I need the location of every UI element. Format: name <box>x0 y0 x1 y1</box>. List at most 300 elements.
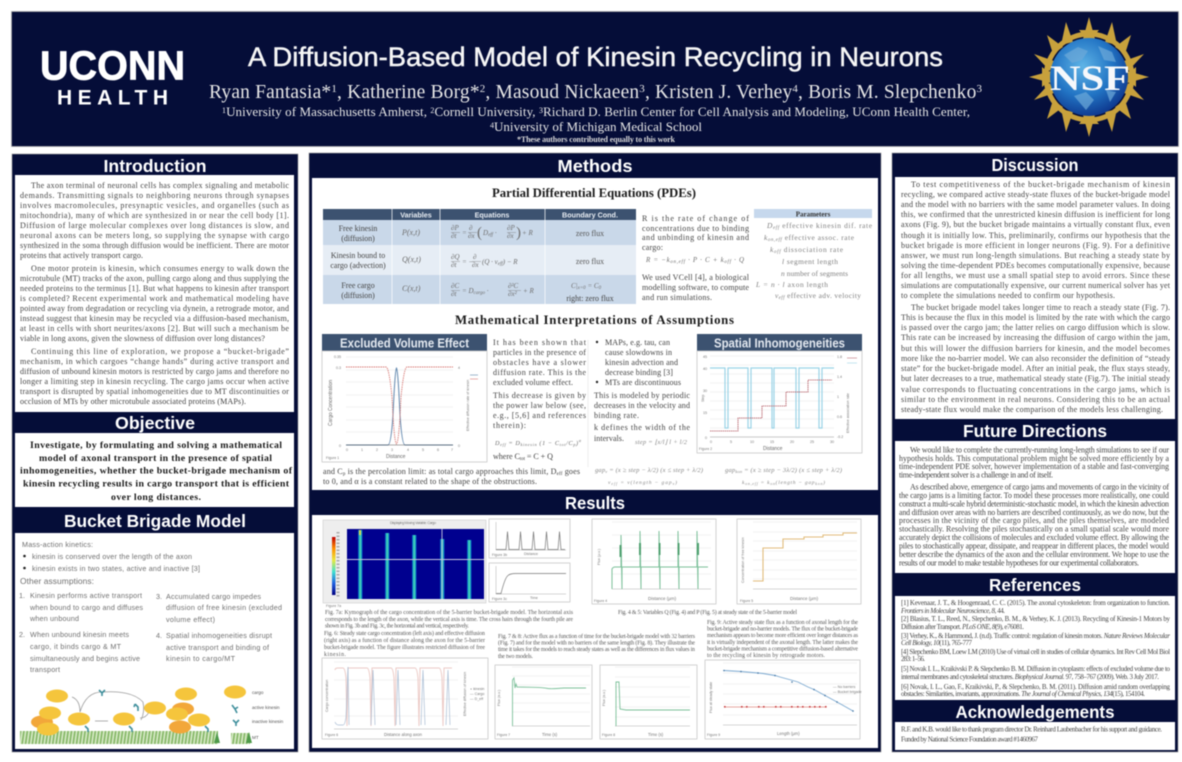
text: spatial inhomogeneities explanation: MAPs, e.g. tau, can <box>605 338 670 347</box>
panel: discussion text: more like the no-barrier model. We can also reconsider the definition of “steady <box>901 354 1171 363</box>
parameters list: k <box>764 233 768 242</box>
panel: discussion text: though it is initially low. This, preliminarily, confirms our hypothesis that the <box>901 231 1170 240</box>
text: spatial inhomogeneities explanation: kon <box>735 469 743 474</box>
chart panel: Spatial Inhomogeneities: 30 <box>830 440 834 444</box>
panel: discussion text: but this will lower the diffusion barriers for kinesin, and the model becomes <box>901 344 1170 353</box>
panel: references list: Frontiers in Molecular Neuroscience, 8, 44. <box>900 608 1005 615</box>
chart panel: Spatial Inhomogeneities: Figure 2 <box>699 447 712 451</box>
panel: future directions text <box>895 441 1175 573</box>
panel: references list: internal membranes and cytoskeletal structures. Biophysical Journal. 97, 758–767 (2009). Web. 3 July 2017. <box>901 674 1159 681</box>
header banner <box>12 12 1178 146</box>
mass-action kinetics list <box>20 540 200 586</box>
panel: introduction text: pointed away from degradation or recycling via dynein, a retrograde motor, and <box>20 304 289 313</box>
table: PDEs: (diffusion) <box>341 234 375 243</box>
table: PDEs: = C <box>586 282 599 290</box>
table: PDEs: ∂²C <box>508 282 519 290</box>
chart panel: Spatial Inhomogeneities: 30 <box>703 389 707 393</box>
text: spatial inhomogeneities explanation: = (x ≥ step − 3λ/2) (x ≤ step + λ/2) <box>742 467 842 474</box>
panel: future directions text: We would like to complete the currently-running long-length simulations to see if our <box>910 446 1169 454</box>
figure 4: flux: Figure 4 <box>594 599 607 603</box>
title: A Diffusion-Based Model of Kinesin Recycling in Neurons <box>248 42 943 72</box>
UConn Health logo: HEALTH <box>57 86 168 110</box>
panel: introduction text: Continuing this line of exploration, we propose a “bucket-brigade” <box>31 347 289 356</box>
text: excluded volume explanation: and C <box>323 467 343 476</box>
caption: figure 9: bucket-brigade and no-barrier models. The flux of the bucket-brigade <box>707 626 858 632</box>
panel: left column <box>12 154 298 752</box>
table: PDEs: zero flux <box>576 257 604 266</box>
panel: future directions text: results of our model to make testable hypotheses for our experimental collaborators. <box>899 558 1139 568</box>
table: PDEs: (Q · v <box>482 258 498 266</box>
caption: figure 6: kinesin. <box>324 652 347 658</box>
text: excluded volume explanation: e.g., [5,6] and references <box>493 411 586 420</box>
parameters list: eff <box>773 226 780 231</box>
figure 4: flux <box>592 519 716 604</box>
caption: figure 9: Fig. 9: Active steady state flux as a function of axonal length for the <box>707 619 858 626</box>
table: PDEs <box>323 209 636 304</box>
chart panel: Spatial Inhomogeneities: 40 <box>703 367 707 371</box>
assumptions list: cargo, it binds cargo & MT <box>30 642 122 651</box>
assumptions list: Accumulated cargo impedes <box>166 592 261 601</box>
chart panel: Excluded Volume Effect: 4 <box>458 366 460 370</box>
text: rate of change: R is the rate of change of <box>642 214 749 223</box>
table: PDEs: ∂t <box>451 232 457 240</box>
figure 7: flux over time: Flux (a.u.) <box>497 690 501 706</box>
panel: acknowledgements text: R.F. and K.B. would like to thank program director Dr. Reinhard Laubenbacher for his support and guidance. <box>901 726 1162 734</box>
panel: future directions text: time-independent PDE solver, however implementation of a stable and fast-converging <box>899 462 1169 471</box>
figure 3b: line chart: Figure 3b <box>492 553 507 557</box>
chart panel: Excluded Volume Effect: 0 <box>346 448 348 452</box>
authors: Ryan Fantasia* <box>209 82 331 103</box>
figure 9: flux vs length: Figure 9 <box>707 733 720 737</box>
diagram: bucket brigade: cargo <box>252 690 264 695</box>
table: PDEs: cargo (advection) <box>330 261 386 270</box>
assumptions list: diffusion of free kinesin (excluded <box>166 603 282 612</box>
figure 6: steady state cargo and diffusion: ∘ kinesin <box>470 687 484 691</box>
panel: introduction text: instead suggest that kinesin may be recycled via a diffusion-based mechanism, <box>20 314 289 323</box>
affiliations: Cornell University, <box>434 104 539 119</box>
panel: references list: Cell Biology, 10(11), 765-777 <box>901 640 973 647</box>
chart panel: Spatial Inhomogeneities: 20 <box>790 440 794 444</box>
assumptions list: volume effect) <box>166 615 215 624</box>
table: PDEs: ∂ <box>473 253 477 261</box>
assumptions list <box>19 591 282 674</box>
authors: , Katherine Borg* <box>337 82 480 103</box>
parameters list: eff <box>779 296 785 301</box>
panel: introduction text: involves macromolecules, presynaptic vesicles, and organelles (such as <box>20 201 289 210</box>
text: excluded volume explanation: obstacles have a slower <box>493 358 586 367</box>
chart panel: Excluded Volume Effect <box>322 334 487 462</box>
chart panel: Spatial Inhomogeneities: Spatial Inhomogeneities <box>714 336 845 350</box>
text: spatial inhomogeneities explanation: kon <box>815 481 822 486</box>
table: PDEs: ∂x <box>468 232 475 240</box>
text: spatial inhomogeneities explanation: MTs are discontinuous <box>605 378 681 387</box>
table: PDEs: C| <box>571 282 578 290</box>
caption: figures 7 and 8: Fig. 7 & 8: Active flux as a function of time for the bucket-brigade model with 32 barriers <box>498 633 696 640</box>
panel: introduction text: diffusion of unbound kinesin motors is restricted by cargo jams and therefore no <box>20 367 289 376</box>
authors: 2 <box>480 83 485 95</box>
caption: figure 7a: Fig. 7a: Kymograph of the cargo concentration of the 5-barrier bucket-brigade model. The horizontal axis <box>325 609 574 616</box>
text: excluded volume explanation: It has been shown that <box>493 338 587 347</box>
panel: introduction text <box>15 175 294 412</box>
text: rate of change: on,eff <box>670 260 686 265</box>
table: PDEs: ∂t <box>451 290 457 298</box>
mass-action kinetics list: kinesin exists in two states, active and inactive [3] <box>32 564 200 573</box>
authors: 1 <box>331 83 337 95</box>
figure 5: concentration: Figure 5 <box>740 599 753 603</box>
table: PDEs: cargo <box>474 291 486 296</box>
affiliations: University of Michigan Medical School <box>494 119 702 134</box>
table: PDEs: = − <box>462 258 473 266</box>
figure 4: flux: Distance (µm) <box>648 596 677 601</box>
figure 5: concentration: Distance (µm) <box>790 596 819 601</box>
panel: future directions text: the cargo jams is a limiting factor. To model these processes more realistically, one could <box>899 491 1169 500</box>
chart panel: Excluded Volume Effect: 0.3 <box>336 366 341 370</box>
caption: figure 6: Fig. 6: Steady state cargo concentration (left axis) and effective diffusion <box>324 630 485 637</box>
heading: Discussion: Discussion <box>992 155 1078 175</box>
panel: discussion text: This rate can be increased by increasing the diffusion of cargo within the jam, <box>901 333 1170 342</box>
text: spatial inhomogeneities explanation: kinesin advection and <box>605 358 678 367</box>
chart panel: Spatial Inhomogeneities: 0.6 <box>837 415 842 419</box>
table: PDEs: = D <box>462 287 474 295</box>
table: PDEs: Equations <box>475 210 509 220</box>
parameters list <box>754 209 873 301</box>
authors: , Boris M. Slepchenko <box>798 82 976 103</box>
figure 7a: kymograph: Displaying Moving Variable: Cargo <box>390 521 436 525</box>
panel: future directions text: hypothesis holds. This computational problem might be solved more efficiently by a <box>899 454 1169 463</box>
panel: future directions text: and diffusion over areas with no barriers are described continuously, as we do now, but the <box>899 508 1169 517</box>
UConn Health logo: UCONN <box>40 42 185 88</box>
chart panel: Excluded Volume Effect: 6 <box>437 448 439 452</box>
figure 7a: kymograph: Figure 7a <box>326 604 341 608</box>
text: excluded volume explanation: particles in the presence of <box>493 348 586 357</box>
text: rate of change: concentrations due to binding <box>642 224 749 233</box>
figure 7: flux over time <box>495 665 592 739</box>
panel: introduction text: mitochondria), many of which are synthesized in or near the cell body [1]. <box>20 211 289 220</box>
assumptions list: 2. <box>19 630 25 639</box>
table: PDEs: Boundary Cond. <box>562 210 618 220</box>
assumptions list: 3. <box>156 592 162 601</box>
figure 5: concentration: Concentration of free kinesin <box>741 537 745 583</box>
text: rate of change: and unbinding of kinesin and <box>642 233 749 242</box>
panel: discussion text: similar to the environment in real neurons. Considering this to be an actual <box>901 395 1171 404</box>
heading: Future Directions: Future Directions <box>963 421 1107 441</box>
panel: references list: [4] Slepchenko BM, Loew LM (2010) Use of virtual cell in studies of cellular dynamics. Int Rev Cell Mol Biol <box>901 649 1170 656</box>
parameters list: k <box>770 245 774 254</box>
affiliations: *These authors contributed equally to this work <box>517 135 676 144</box>
table: PDEs: ∂P <box>451 224 459 232</box>
text: excluded volume explanation: = C + Q <box>525 452 553 461</box>
caption: figures 7 and 8 <box>498 633 696 660</box>
authors: , Masoud Nickaeen <box>485 82 639 103</box>
chart panel: Spatial Inhomogeneities <box>697 334 862 453</box>
caption: figure 9: to the recycling of kinesin by retrograde motors. <box>707 652 826 659</box>
parameters list: dissociation rate <box>781 245 844 254</box>
chart panel: Excluded Volume Effect: Distance <box>386 454 406 460</box>
text: spatial inhomogeneities explanation: k defines the width of the <box>594 423 690 432</box>
chart panel: Spatial Inhomogeneities: 15 <box>703 411 707 415</box>
caption: figure 7a: shown in Fig. 3b and Fig. 3c, the horizontal and vertical, respectively. <box>325 624 470 630</box>
text: excluded volume explanation: diffusion rate. This is the <box>493 368 586 377</box>
text: rate of change: · Q <box>732 256 744 264</box>
chart panel: Spatial Inhomogeneities: 5 <box>730 440 732 444</box>
parameters list: on,eff <box>768 238 782 243</box>
chart panel: Excluded Volume Effect: 0 <box>339 444 341 448</box>
text: rate of change: R = −k <box>646 256 670 264</box>
figure 9: flux vs length: Flux at steady state <box>709 682 713 713</box>
affiliations: University of Massachusetts Amherst, <box>226 104 430 119</box>
panel: introduction text: mechanism, in which cargoes “change hands” during active transport and <box>20 357 289 366</box>
text: excluded volume explanation: (1 − C <box>537 440 560 447</box>
text: spatial inhomogeneities explanation: gap <box>595 467 605 474</box>
panel: discussion text: solving the time-dependent PDEs becomes computationally expensive, because <box>901 261 1170 270</box>
panel: discussion text: The bucket brigade model takes longer time to reach a steady state (Fig. 7). <box>911 303 1170 312</box>
panel: references list: [3] Verhey, K., & Hammond, J. (n.d). Traffic control: regulation of kinesin motors. Nature Reviews Molecular <box>901 633 1170 640</box>
caption: figures 7 and 8: the two models. <box>498 654 534 660</box>
parameters list: effective assoc. rate <box>782 233 855 242</box>
text: rate of change: cargo: <box>642 243 663 252</box>
text: spatial inhomogeneities explanation: ) <box>822 479 825 486</box>
affiliations: 4 <box>490 121 494 130</box>
figure 8: flux over time: Flux (a.u.) <box>602 690 606 706</box>
panel: discussion text: to complete the simulations needed to confirm our hypothesis. <box>901 291 1115 300</box>
table: PDEs: ∂t <box>451 261 457 269</box>
authors: 3 <box>639 83 645 95</box>
table: PDEs: Kinesin bound to <box>331 251 385 260</box>
text: spatial inhomogeneities explanation: decreases in the velocity and <box>594 401 690 410</box>
table: PDEs: + R <box>523 287 534 295</box>
figure 6: steady state cargo and diffusion: — D_eff <box>470 697 483 701</box>
table: PDEs: ∂C <box>451 282 459 290</box>
chart panel: Excluded Volume Effect: 0.35 <box>334 355 341 359</box>
figure 6: steady state cargo and diffusion: Distance along axon <box>384 732 423 737</box>
text: spatial inhomogeneities explanation: on,eff <box>745 481 759 487</box>
table: PDEs: Free cargo <box>341 281 375 290</box>
text: spatial inhomogeneities explanation: This is modeled by periodic <box>594 391 690 400</box>
panel: introduction text: at least in cells with short neurites/axons [2]. But will such a mechanism be <box>20 324 289 333</box>
assumptions list: when unbound <box>29 614 79 623</box>
panel: objective text: over long distances. <box>111 492 202 503</box>
table: PDEs: right: zero flux <box>566 294 614 303</box>
chart panel: Spatial Inhomogeneities: 0 <box>710 440 712 444</box>
text: excluded volume explanation: goes <box>563 467 580 476</box>
caption: figures 7 and 8: (Fig. 7) and for the model with no barriers of the same length (Fig. 8). They illustrate the <box>498 640 695 646</box>
affiliations: 3 <box>539 106 543 115</box>
parameters list: D <box>766 221 773 230</box>
figure 8: flux over time: Figure 8 <box>602 733 615 737</box>
chart panel: Excluded Volume Effect: Figure 1 <box>326 456 339 460</box>
text: rate of change <box>642 214 750 302</box>
panel: discussion text: bucket brigade is more efficient in longer neurons (Fig. 9). For a definitive <box>901 241 1170 250</box>
text: spatial inhomogeneities explanation: cause slowdowns in <box>605 348 672 357</box>
panel: future directions text: processes in the vicinity of the cargo piles, and the piles themselves, are modeled <box>899 516 1169 525</box>
panel: acknowledgements text <box>895 722 1175 750</box>
panel: introduction text: Diffusion of large molecular complexes over long distances is slow, and <box>20 221 289 230</box>
table: PDEs: (diffusion) <box>341 291 375 300</box>
panel: future directions text: better describe the dynamics of the axon and the cellular environment. We hope to use the <box>899 550 1169 559</box>
text: spatial inhomogeneities explanation <box>594 338 842 487</box>
figure 6: steady state cargo and diffusion: Figure 6 <box>325 733 338 737</box>
caption: figure 7a <box>325 609 574 630</box>
assumptions list: transport <box>30 665 60 674</box>
panel: objective text <box>15 433 294 507</box>
text: excluded volume explanation: D <box>495 440 499 447</box>
heading: Acknowledgements: Acknowledgements <box>956 702 1115 722</box>
table: PDEs: C(x,t) <box>402 284 421 293</box>
text: excluded volume explanation: eff <box>557 472 563 477</box>
table: PDEs: Q(x,t) <box>402 255 421 264</box>
panel: introduction text: transport is disrupted by spatial inhomogeneities due to MT discontinuities or <box>20 387 289 396</box>
chart panel: Spatial Inhomogeneities: 10 <box>750 440 754 444</box>
figure 9: flux vs length: Length (µm) <box>777 731 800 736</box>
text: excluded volume explanation <box>323 338 587 486</box>
assumptions list: kinesin to cargo/MT <box>166 654 236 663</box>
text: rate of change: · P · C + k <box>686 256 725 264</box>
chart panel: Spatial Inhomogeneities: 25 <box>810 440 814 444</box>
table: PDEs: eff <box>488 233 494 238</box>
panel: discussion text: value corresponds to fluctuating concentrations in the cargo jams, which is <box>901 385 1170 394</box>
text: excluded volume explanation: /C <box>565 440 573 447</box>
text: spatial inhomogeneities explanation: intervals. <box>594 434 624 443</box>
table: PDEs: ∂Q <box>451 253 460 261</box>
caption: figures 7 and 8: time it takes for the models to reach steady states as well as the differences in flux values in <box>498 646 695 653</box>
table: PDEs: Free kinesin <box>339 224 377 233</box>
panel: acknowledgements text: Funded by National Science Foundation award #1460967 <box>901 736 1039 744</box>
text: spatial inhomogeneities explanation: (length − gap <box>776 479 815 486</box>
text: excluded volume explanation: is the percolation limit: as total cargo approaches this limit, D <box>345 467 557 476</box>
panel: references list <box>895 596 1175 700</box>
text: spatial inhomogeneities explanation: step = ⌊x/l⌋ l + l/2 <box>635 439 688 446</box>
figure 5: concentration <box>737 519 861 604</box>
panel: future directions text: As described above, emergence of cargo jams and movements of cargo in the vicinity of <box>910 482 1169 492</box>
mass-action kinetics list: kinesin is conserved over the length of the axon <box>32 552 192 561</box>
assumptions list: Kinesin performs active transport <box>30 591 142 600</box>
chart panel: Excluded Volume Effect: 7 <box>451 448 453 452</box>
text: excluded volume explanation: eff <box>500 442 506 447</box>
parameters list: L = n · l axon length <box>755 280 828 289</box>
chart panel: Spatial Inhomogeneities: Effective association rate <box>846 393 850 433</box>
panel: discussion text: for all lengths, we must use a small spatial step to avoid errors. Since these <box>901 271 1170 280</box>
panel: introduction text: occlusion of MTs by other microtubule associated proteins (MAPs). <box>20 397 246 406</box>
affiliations: 1 <box>222 106 226 115</box>
caption: figure 6: bucket-brigade model. The figure illustrates restricted diffusion of free <box>324 644 485 651</box>
heading: References: References <box>989 575 1081 595</box>
caption: figure 6: (right axis) as a function of distance along the axon for the 5-barrier <box>324 637 485 644</box>
chart panel: Excluded Volume Effect: 3 <box>391 448 393 452</box>
diagram: bucket brigade: inactive kinesin <box>252 719 284 724</box>
chart panel: Spatial Inhomogeneities: Step <box>701 395 705 402</box>
text: spatial inhomogeneities explanation: k <box>742 480 744 486</box>
text: spatial inhomogeneities explanation: v <box>672 481 674 486</box>
panel: future directions text: time-independent solver is a challenge in and of itself. <box>899 470 1053 480</box>
heading: Methods: Methods <box>558 156 633 176</box>
text: excluded volume explanation: excluded volume effect. <box>493 378 573 387</box>
chart panel: Excluded Volume Effect: 0 <box>458 444 460 448</box>
text: excluded volume explanation: kinesin <box>520 442 537 447</box>
table: PDEs: + R <box>522 229 533 237</box>
affiliations <box>222 104 970 144</box>
text: spatial inhomogeneities explanation: = k <box>758 480 770 486</box>
text: excluded volume explanation: α <box>579 438 582 443</box>
figure 3b: line chart: Distance <box>524 552 538 556</box>
panel: introduction text: demands. Transmitting signals to neighboring neurons through synapses <box>20 191 289 200</box>
caption: figure 9: mechanism appears to become more efficient over longer distances as <box>707 632 859 639</box>
assumptions list: simultaneously and begins active <box>30 654 140 663</box>
text: excluded volume explanation: = D <box>506 440 520 447</box>
text: spatial inhomogeneities explanation: gap <box>725 467 735 474</box>
table: PDEs: zero flux <box>576 229 604 238</box>
figure 4: flux: Flux (µ.u.) <box>597 549 601 565</box>
assumptions list: Spatial inhomogeneities disrupt <box>166 631 272 640</box>
panel: discussion text: this, we confirmed that the unrestricted kinesin diffusion is inefficient for long <box>901 210 1170 219</box>
table: PDEs: eff <box>498 262 503 267</box>
authors: , Kristen J. Verhey <box>645 82 792 103</box>
chart panel: Spatial Inhomogeneities: 1.4 <box>837 375 842 379</box>
panel: methods and results <box>309 153 881 752</box>
table: PDEs: = <box>462 229 467 237</box>
diagram: bucket brigade: MT <box>252 735 259 740</box>
panel: references list: [5] Novak I. L., Kraikivski P. & Slepchenko B. M. Diffusion in cytoplasm: effects of excluded volume due to <box>901 666 1171 673</box>
assumptions list: 4. <box>156 631 162 640</box>
text: excluded volume explanation: ) <box>575 440 578 447</box>
panel: bucket brigade model <box>15 533 294 749</box>
text: rate of change: We used VCell [4], a biological <box>642 273 750 282</box>
heading: Partial Differential Equations: Partial Differential Equations (PDEs) <box>492 186 696 200</box>
assumptions list: 1. <box>19 591 25 600</box>
figure 8: flux over time <box>600 665 697 739</box>
table: PDEs: · <box>493 229 497 237</box>
panel: introduction text: One motor protein is kinesin, which consumes energy to walk down the <box>31 264 289 273</box>
parameters list: l segment length <box>782 257 838 266</box>
panel: introduction text: needed proteins to the terminus [1]. But what happens to kinesin after transport <box>20 284 290 293</box>
caption: figure 6 <box>324 630 485 658</box>
figure 6: steady state cargo and diffusion <box>322 658 488 739</box>
NSF logo: NSF <box>1050 58 1130 98</box>
chart panel: Spatial Inhomogeneities: 0 <box>705 436 707 440</box>
panel: discussion text <box>895 177 1175 419</box>
assumptions list: active transport and binding of <box>166 643 269 652</box>
table: PDEs: ) − R <box>502 258 518 266</box>
diagram: bucket brigade: active kinesin <box>252 705 280 710</box>
panel: future directions text: piles to stochastically appear, dissipate, and reappear in different places, the model would <box>899 542 1169 550</box>
figure 3b: line chart <box>489 519 570 558</box>
text: excluded volume explanation: the power law below (see, <box>493 401 586 410</box>
table: PDEs: D <box>483 229 488 237</box>
chart panel: Excluded Volume Effect: Excluded Volume Effect <box>340 336 470 350</box>
chart panel: Excluded Volume Effect: 2 <box>376 448 378 452</box>
panel: objective text: model of axonal transport in the presence of spatial <box>39 453 272 464</box>
panel: future directions text: accurately depict the collisions of molecules and excluded volume effect. By allowing the <box>899 533 1169 542</box>
table: PDEs: · <box>485 287 489 295</box>
figure 6: steady state cargo and diffusion: Cargo concentration <box>325 680 329 712</box>
text: excluded volume explanation: This decrease is given by <box>493 391 587 400</box>
table: PDEs: ∂x² <box>508 290 518 298</box>
diagram: bucket brigade <box>20 686 284 744</box>
figure 9: flux vs length: — Bucket brigade <box>833 690 862 694</box>
panel: discussion text: This is because the flux in this model is limited by the rate with which the cargo <box>901 313 1170 322</box>
chart panel: Excluded Volume Effect: Cargo Concentration <box>328 380 334 426</box>
panel: references list: [2] Blasius, T. L., Reed, N., Slepchenko, B. M., & Verhey, K. J. (2013). Recycling of Kinesin-1 Motors by <box>901 616 1171 623</box>
panel: references list: 283: 1–56. <box>901 656 925 663</box>
panel: discussion text: simulations are computationally expensive, our current numerical solver has yet <box>901 281 1171 290</box>
figure 6: steady state cargo and diffusion: — Cargo <box>470 692 484 696</box>
panel: introduction text: proteins that actively transport cargo. <box>20 251 143 260</box>
caption: figure 9 <box>707 619 859 659</box>
panel: discussion text: answer, we must run long-length simulations. But reaching a steady state by <box>901 251 1171 260</box>
text: excluded volume explanation: where C <box>493 452 520 461</box>
panel: objective text: kinesin recycling results in cargo transport that is efficient <box>23 478 290 490</box>
text: spatial inhomogeneities explanation: binding rate. <box>594 411 639 420</box>
panel: introduction text: is completed? Recent experimental work and mathematical modeling have <box>20 294 289 303</box>
